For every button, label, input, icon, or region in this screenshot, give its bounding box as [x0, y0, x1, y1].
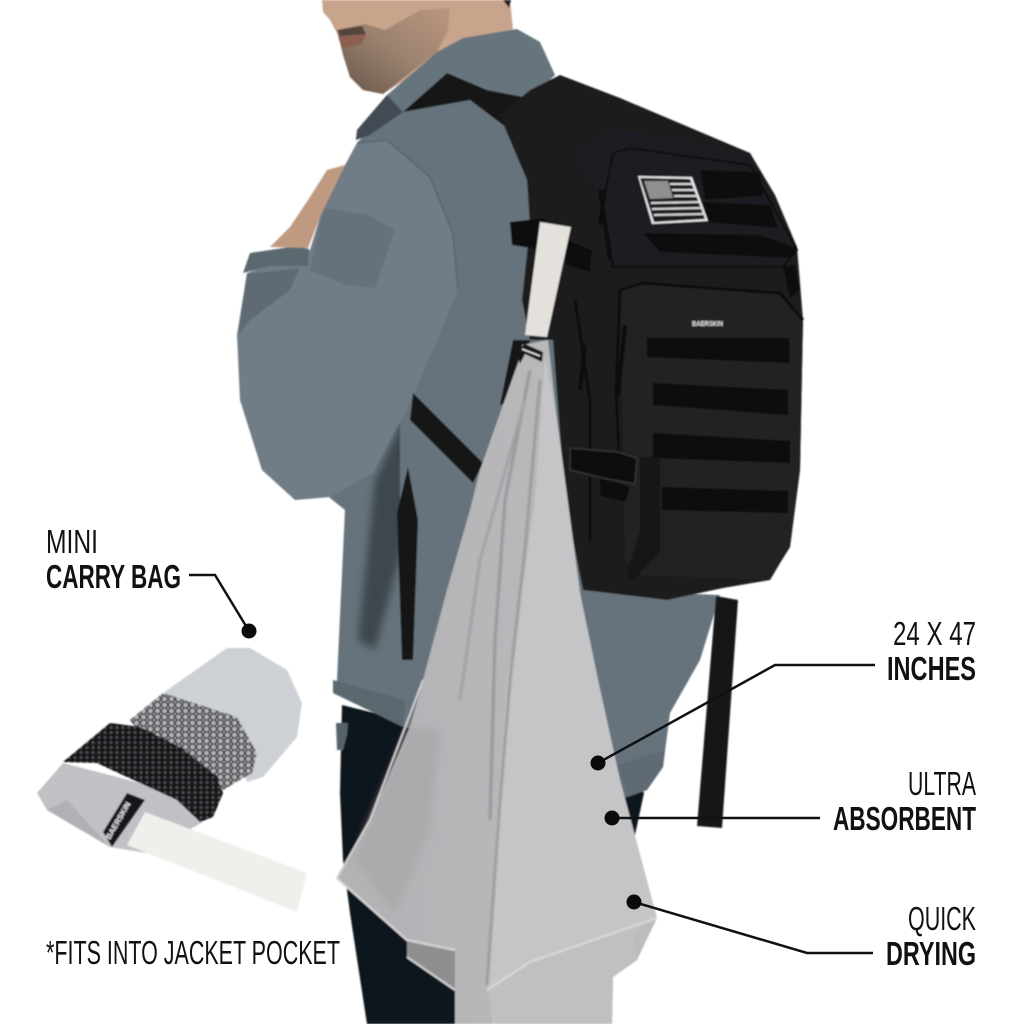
towel label	[517, 344, 543, 364]
callout: quick drying: DRYING	[886, 935, 976, 972]
fleece jacket	[237, 29, 720, 797]
callout: size: INCHES	[887, 650, 976, 687]
hand	[270, 165, 345, 248]
callout: size: 24 X 47	[893, 615, 976, 652]
buckles	[510, 218, 800, 502]
front lower curl	[487, 918, 657, 1024]
hem	[333, 680, 405, 727]
towel	[337, 340, 657, 1024]
brand label: BAERSKIN	[692, 321, 723, 328]
rolled towel	[37, 763, 203, 853]
inner fold	[407, 940, 455, 990]
callout: ultra absorbent: ULTRA	[908, 765, 976, 802]
torso shading	[355, 424, 401, 651]
callout: quick drying	[626, 894, 976, 972]
front mesh	[63, 723, 223, 822]
collar	[356, 29, 555, 140]
callout: ultra absorbent	[604, 765, 976, 837]
upper mesh	[130, 693, 257, 790]
hanging loop strap	[525, 222, 571, 337]
zipper pulls	[580, 190, 625, 395]
side details	[575, 190, 620, 540]
grey pouch	[163, 648, 302, 782]
callout: mini carry bag: CARRY BAG	[46, 558, 181, 595]
side compression	[627, 457, 660, 583]
webbing rows	[647, 338, 790, 513]
mini carry bag	[37, 648, 307, 912]
callout: size	[590, 615, 976, 770]
keychain	[336, 723, 348, 750]
photo: man with backpack and towel	[237, 0, 803, 1024]
note: fits into jacket pocket: *FITS INTO JACKET POCKET	[46, 934, 340, 971]
callout: mini carry bag: MINI	[46, 523, 98, 560]
callout: mini carry bag	[46, 523, 256, 638]
velcro panel	[643, 170, 797, 258]
front panel	[487, 357, 657, 1024]
face and neck	[322, 0, 514, 94]
flag patch	[638, 176, 708, 224]
torso	[320, 90, 720, 797]
left panel shade	[355, 727, 440, 915]
sleeve	[237, 140, 458, 500]
backpack straps	[397, 73, 738, 828]
black tag: BAERSKIN	[104, 800, 133, 841]
jeans	[340, 705, 644, 1024]
backpack	[500, 75, 803, 600]
white loop	[127, 812, 307, 912]
callout: quick drying: QUICK	[908, 900, 976, 937]
fold lines	[460, 370, 540, 985]
black tag	[103, 793, 145, 847]
